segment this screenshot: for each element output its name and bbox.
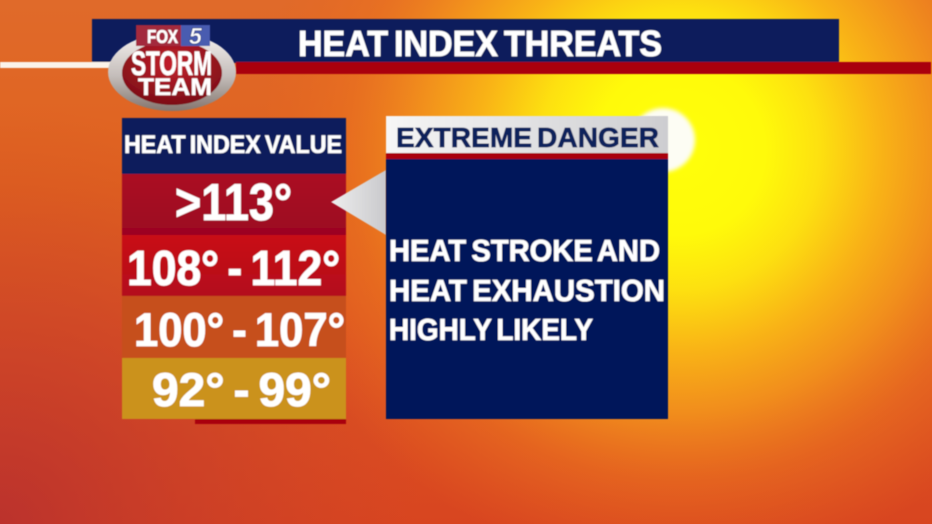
panel body text: HIGHLY LIKELY bbox=[389, 312, 593, 347]
scale header: HEAT INDEX VALUE bbox=[124, 131, 342, 159]
heading: heat index threats: HEAT INDEX THREATS bbox=[298, 23, 662, 64]
scale header bbox=[122, 118, 346, 174]
row: 108 to 112 degrees: 108° - 112° bbox=[127, 242, 340, 296]
logo: Fox 5 Storm Team: TEAM bbox=[138, 74, 212, 101]
row: above 113 degrees: >113° bbox=[175, 174, 292, 232]
panel body text: HEAT STROKE AND bbox=[389, 233, 660, 268]
row: 92 to 99 degrees: 92° - 99° bbox=[152, 363, 331, 416]
title banner bbox=[0, 19, 931, 74]
logo: Fox 5 Storm Team: FOX bbox=[147, 27, 178, 47]
logo: Fox 5 Storm Team bbox=[108, 23, 236, 111]
row: 92 to 99 degrees bbox=[122, 358, 346, 419]
row: above 113 degrees bbox=[122, 174, 346, 235]
panel: heat index value scale bbox=[122, 118, 346, 424]
panel heading tab: EXTREME DANGER bbox=[396, 122, 659, 153]
logo: Fox 5 Storm Team: 5 bbox=[189, 23, 203, 49]
panel body text bbox=[389, 233, 665, 347]
logo: Fox 5 Storm Team: STORM bbox=[131, 45, 212, 83]
row: 100 to 107 degrees: 100° - 107° bbox=[134, 303, 345, 356]
icon: sun disc bbox=[631, 108, 695, 172]
panel: extreme danger bbox=[386, 116, 668, 419]
panel body text: HEAT EXHAUSTION bbox=[389, 273, 665, 308]
arrow: pointer to top row bbox=[331, 170, 386, 235]
panel heading tab bbox=[386, 116, 668, 159]
